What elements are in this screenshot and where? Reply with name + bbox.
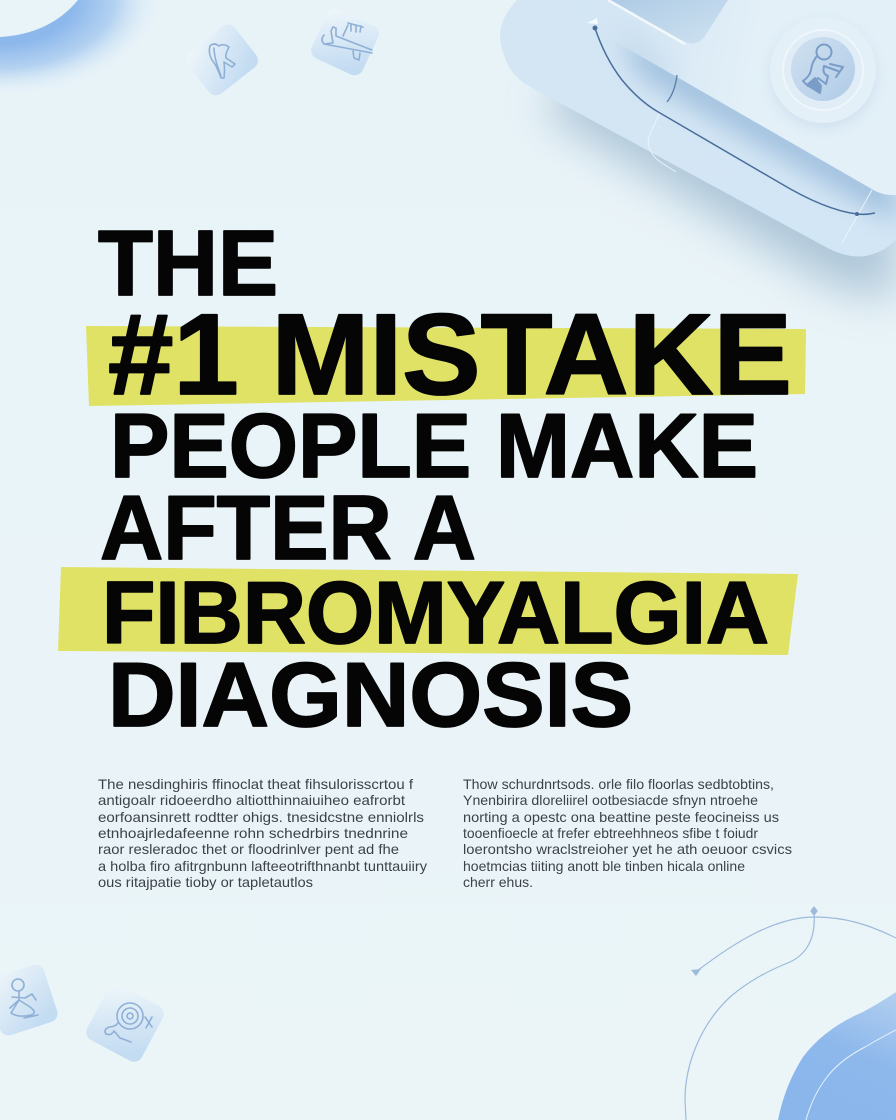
chart curve	[595, 28, 875, 214]
text block: left column: eorfoansinrett rodtter ohigs. tnesidcstne enniolrls	[98, 809, 424, 825]
card shadow	[540, 60, 896, 300]
text block: left column	[98, 776, 427, 890]
highlight: #1 mistake	[86, 326, 806, 406]
title	[58, 211, 806, 746]
title: FIBROMYALGIA	[102, 563, 769, 662]
panel: top-right device illustration	[500, 0, 896, 300]
large card	[500, 0, 896, 257]
title: DIAGNOSIS	[108, 645, 633, 746]
top tab	[608, 0, 728, 44]
icon tile: seated figure	[0, 962, 60, 1038]
title: THE	[98, 211, 278, 315]
icon tile: target and scissors	[83, 981, 168, 1066]
round badge	[770, 17, 876, 128]
decoration: top-left blue crescent	[0, 0, 165, 98]
text block: left column: antigoalr ridoeerdho altiotthinnaiuiheo eafrorbt	[98, 792, 405, 808]
diamond marker	[811, 907, 817, 915]
thin inner outline	[648, 113, 872, 243]
text block: right column: Ynenbirira dloreliirel ootbesiacde sfnyn ntroehe	[463, 792, 758, 808]
decoration: thin arrow curves	[685, 907, 896, 1120]
title: #1 MISTAKE	[108, 291, 792, 419]
text block: right column: Thow schurdnrtsods. orle filo floorlas sedbtobtins,	[463, 776, 774, 792]
text block: right column: cherr ehus.	[463, 874, 533, 890]
text block: left column: The nesdinghiris ffinoclat theat fihsulorisscrtou f	[98, 776, 413, 792]
text block: left column: raor resleradoc thet or floodrinlver pent ad fhe	[98, 841, 399, 857]
icon: figure	[803, 44, 843, 93]
icon tile: treatment table	[307, 4, 386, 80]
title: AFTER A	[100, 478, 476, 579]
upper panel	[560, 0, 896, 195]
text block: left column: ous ritajpatie tioby or tapletautlos	[98, 874, 313, 890]
arrowhead	[691, 969, 701, 976]
text block: right column: norting a opestc ona beattine peste feocineiss us	[463, 809, 779, 825]
decoration: bottom-right blue shape	[778, 992, 896, 1120]
text block: right column: loerontsho wraclstreioher yet he ath oeuoor csvics	[463, 841, 792, 857]
title: PEOPLE MAKE	[110, 396, 758, 497]
text block: left column: etnhoajrledafeenne rohn schedrbirs tnednrine	[98, 825, 408, 841]
highlight: fibromyalgia	[58, 567, 798, 655]
text block: right column: hoetmcias tiiting anott ble tinben hicala online	[463, 858, 745, 874]
text block: right column: tooenfioecle at frefer ebtreehhneos sfibe t foiudr	[463, 825, 758, 841]
shaded band	[620, 30, 896, 222]
text block: left column: a holba firo afitrgnbunn lafteeotrifthnanbt tunttauiiry	[98, 858, 427, 874]
icon tile: leg	[182, 21, 262, 99]
white pointer	[587, 18, 598, 24]
text block: right column	[463, 776, 792, 890]
